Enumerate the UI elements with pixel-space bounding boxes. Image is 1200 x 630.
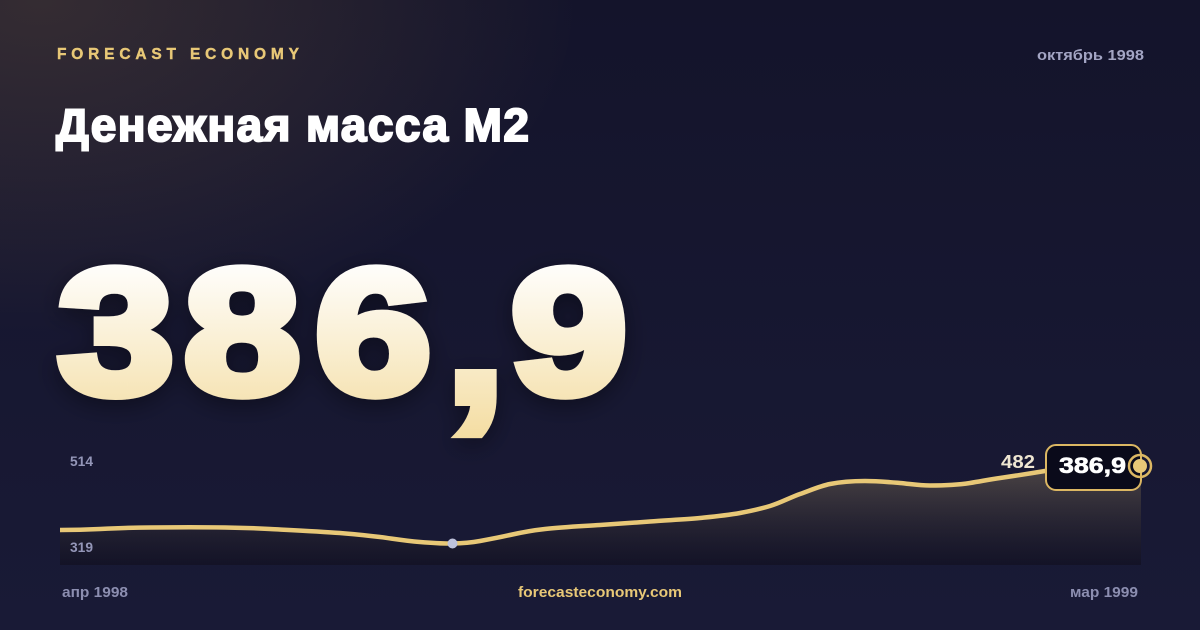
end date label: мар 1999 [1070,584,1138,601]
big value: 386 [58,234,431,431]
source link: forecasteconomy.com [518,584,682,601]
big value: , [441,216,510,448]
title: Денежная масса М2 [56,99,529,151]
brand name: FORECAST ECONOMY [57,46,300,63]
chart area shade [60,466,1141,565]
peak value label: 482 [1001,452,1035,472]
axis max label: 514 [70,454,93,469]
date label: октябрь 1998 [1037,47,1144,64]
current point marker [1129,455,1151,477]
low point marker [448,538,458,548]
big value [58,216,627,448]
axis min label: 319 [70,540,93,555]
chart [60,445,1151,565]
current value badge [1046,445,1141,490]
data line [60,470,1048,544]
chart area fill [60,466,1141,565]
start date label: апр 1998 [62,584,128,601]
big value: 9 [511,234,627,431]
current value badge: 386,9 [1059,453,1126,478]
